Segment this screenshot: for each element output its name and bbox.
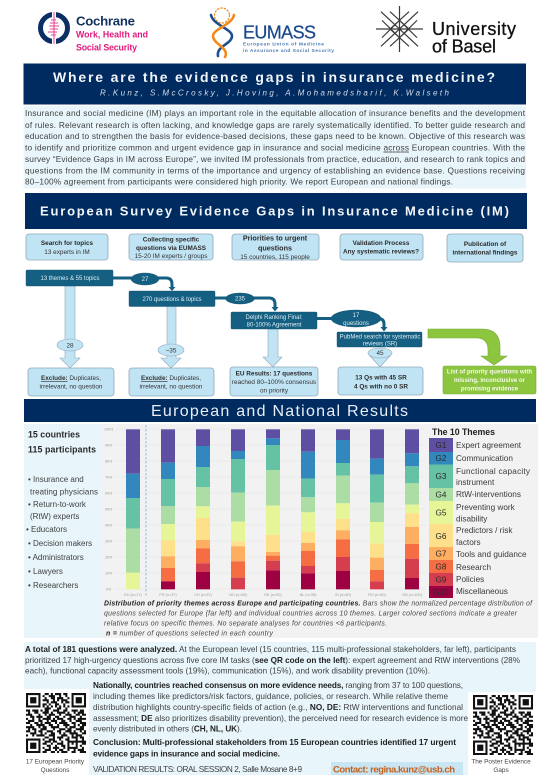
results banner	[24, 399, 536, 422]
authors: R.Kunz, S.McCrosky, J.Hoving, A.Mohamedsharif, K.Walseth	[100, 88, 450, 98]
caption: left QR: 17 European Priority	[26, 758, 85, 766]
caption	[104, 600, 533, 638]
result box: priority list: List of priority questions with	[447, 368, 532, 376]
arrow: 28 excluded	[57, 286, 83, 368]
legend: the 10 themes: G1	[436, 441, 447, 450]
text: national findings: evenly distributed in others (CH, NL, UK).	[93, 724, 242, 734]
flow step: collecting questions: 15-20 IM experts / groups	[135, 253, 207, 260]
legend: the 10 themes: Miscellaneous	[456, 587, 508, 596]
text: conclusion: Conclusion: Multi-professional stakeholders from 15 European countries identified 17 urgent	[93, 737, 456, 747]
legend: the 10 themes: G8	[436, 562, 447, 572]
stacked bar chart: 90%	[105, 444, 113, 448]
arrow: 27 connector	[113, 273, 176, 291]
logo: University of Basel: of Basel	[432, 36, 496, 56]
flow step: validation: Any systematic reviews?	[343, 248, 419, 256]
flow step: publication: international findings	[453, 250, 518, 256]
caption: right QR: The Poster Evidence	[471, 758, 531, 766]
panel: introduction: Insurance and social medicine (IM) plays an important role in the equitable allocation of insurance benefits and the development	[25, 108, 526, 118]
text: summary	[25, 645, 520, 676]
result box: exclude 2	[129, 368, 214, 396]
heading: survey: European Survey Evidence Gaps in Insurance Medicine (IM)	[40, 204, 509, 218]
panel: introduction: survey “Evidence Gaps in IM across Europe”, we invited IM professionals from practice, education, and research to rank topics and	[25, 154, 525, 164]
stacked bar chart: 10%	[105, 572, 113, 576]
legend: the 10 themes: Expert agreement	[456, 441, 522, 450]
text: conclusion: evidence gaps in insurance and social medicine.	[93, 748, 280, 758]
logo: Cochrane Work, Health and Social Security: Cochrane	[76, 14, 135, 28]
text: national findings: assessment; DE also prioritizes disability prevention), the perceived need for research evidence is more	[93, 714, 468, 723]
result box: priority list: missing, inconclusive or	[454, 377, 526, 384]
text: national findings	[93, 681, 468, 734]
caption: relative focus on specific themes. No separate analyses for countries <6 participants.	[104, 620, 387, 628]
legend: the 10 themes: Predictors / risk	[456, 526, 513, 535]
flow: 13 themes box: 13 themes & 55 topics	[40, 276, 100, 282]
stacked bar chart: DE (n=52)	[264, 593, 282, 597]
stacked bar chart: 20%	[105, 556, 113, 560]
legend: the 10 themes: G3	[436, 472, 447, 481]
flow: PubMed box: PubMed search for systematic	[340, 334, 420, 340]
caption: left QR	[26, 758, 85, 774]
panel: results summary	[24, 642, 536, 775]
legend: the 10 themes: G2	[436, 454, 447, 463]
stacked bar chart: RO (n=80)	[368, 593, 387, 597]
legend: the 10 themes: disability	[456, 514, 488, 524]
bar: CH	[196, 429, 210, 589]
bar: EU	[126, 429, 140, 589]
legend: the 10 themes: RtW-interventions	[456, 490, 521, 499]
callout: contact: Contact: regina.kunz@usb.ch	[333, 764, 455, 776]
legend: the 10 themes: G4	[436, 490, 447, 500]
result box: priority list: promising evidence	[461, 386, 519, 392]
caption: right QR	[471, 758, 531, 774]
bar: NL	[301, 429, 315, 589]
stacked bar chart: 70%	[105, 476, 113, 480]
stacked bar chart: 100%	[104, 428, 114, 432]
stacked bar chart	[104, 425, 425, 597]
legend: the 10 themes	[429, 427, 531, 598]
arrow: 35 excluded	[158, 306, 184, 368]
flow step: priorities: Priorities to urgent	[243, 234, 308, 242]
result box: exclude 2: Exclude: Duplicates,	[141, 375, 201, 382]
panel: introduction: 80–100% agreement from participants were considered high priority. We report European and national findings.	[25, 177, 453, 187]
flow: Delphi box: Delphi Ranking Final:	[245, 315, 303, 321]
panel: participants: 15 countries	[28, 430, 80, 440]
stacked bar chart: 50%	[105, 508, 113, 512]
legend: the 10 themes: G6	[436, 532, 447, 541]
flow step: priorities: questions	[258, 244, 292, 252]
legend: the 10 themes: Research	[456, 563, 491, 572]
panel: participants: • Lawyers	[28, 567, 63, 576]
logo: Cochrane Work, Health and Social Security: Work, Health and	[76, 30, 148, 40]
legend: the 10 themes: Tools and guidance	[456, 550, 527, 559]
result box: EU results	[230, 367, 318, 396]
stacked bar chart: 60%	[105, 492, 113, 496]
text: summary: each), functional capacity assessment tools (19%), communication (15%), and work disability prevention (10%).	[25, 666, 430, 676]
flow step: collecting questions: questions via EUMASS	[136, 245, 207, 252]
bar: SI	[336, 429, 350, 589]
stacked bar chart: GB (n=100)	[402, 593, 423, 597]
logo: University of Basel: University	[432, 19, 516, 39]
text: national findings: distribution highlights country-specific fields of action (e.g., NO, DE: RtW interventions and functional	[93, 703, 463, 712]
result box: priority list	[443, 366, 536, 394]
logo: EUMASS: European Union of Medicine	[243, 42, 324, 48]
stacked bar chart: 80%	[105, 460, 113, 464]
caption: Distribution of priority themes across Europe and participating countries. Bars show the normalized percentage distribution of	[104, 600, 533, 608]
arrow: 17 questions connector: questions	[343, 321, 369, 327]
arrow: 235 connector	[215, 293, 278, 312]
legend: the 10 themes: G10	[433, 588, 449, 597]
panel: introduction	[24, 106, 526, 188]
panel: participants: • Educators	[26, 525, 67, 534]
flow step: search for topics: Search for topics	[41, 240, 94, 247]
text: conclusion	[93, 737, 456, 758]
flow step: publication: Publication of	[464, 241, 507, 248]
stacked bar chart: NO (n=68)	[229, 593, 248, 597]
heading: poster title: Where are the evidence gaps in insurance medicine?	[53, 69, 495, 85]
bar: DE	[266, 429, 280, 589]
arrow: 235 connector: 235	[235, 296, 246, 302]
stacked bar chart: FR (n=37)	[159, 593, 177, 597]
text: summary: A total of 181 questions were analyzed. At the European level (15 countries, 115 multi-professional stakeholders, far left), participants	[25, 645, 516, 654]
stacked bar chart: 30%	[105, 540, 113, 544]
result box: EU results: reached 80–100% consensus	[232, 379, 316, 386]
result box: exclude 2: irrelevant, no question	[140, 384, 203, 390]
legend: the 10 themes: G9	[436, 576, 447, 584]
title banner	[24, 64, 526, 104]
stacked bar chart: CH (n=57)	[194, 593, 213, 597]
panel: participants: • Administrators	[28, 553, 84, 562]
result box: EU results: EU Results: 17 questions	[236, 370, 313, 378]
heading: results: European and National Results	[151, 403, 408, 420]
result box: EU results: on priority	[260, 388, 289, 394]
arrow: 45 reviews	[368, 348, 392, 367]
result box: systematic reviews	[338, 367, 423, 395]
arrow: 45 reviews: 45	[376, 350, 384, 357]
flow step: publication	[447, 234, 523, 262]
panel: participants: 115 participants	[28, 444, 96, 454]
result box: exclude 1: Exclude: Duplicates,	[41, 375, 101, 382]
logo: University of Basel	[376, 6, 516, 56]
logo: EUMASS: in Assurance and Social Security	[243, 48, 334, 54]
bar: FR	[161, 429, 175, 589]
flow: 13 themes box	[26, 270, 113, 286]
caption: n = number of questions selected in each country	[106, 630, 274, 638]
text: summary: prioritized 17 high-urgency questions across five core IM tasks (see QR code on the left): expert agreement and RtW interventions (28%	[25, 656, 520, 665]
panel: participants: (RtW) experts	[30, 512, 79, 521]
logo: EUMASS: EUMASS	[243, 22, 316, 42]
legend: the 10 themes: G5	[436, 508, 447, 518]
flow: PubMed box: reviews (SR)	[363, 342, 397, 348]
legend: the 10 themes: The 10 Themes	[432, 427, 495, 437]
panel: participants: • Decision makers	[28, 539, 92, 548]
survey banner	[25, 193, 527, 229]
result box: systematic reviews: 4 Qs with no 0 SR	[354, 384, 408, 390]
arrow: 27 connector: 27	[142, 277, 149, 283]
arrow: Delphi to EU results	[263, 329, 282, 367]
legend: the 10 themes: Functional capacity	[456, 467, 531, 476]
arrow: green curved	[428, 329, 507, 365]
panel: participants	[24, 424, 101, 638]
text: validation results: VALIDATION RESULTS: ORAL SESSION 2, Salle Mosane 8+9	[93, 765, 302, 774]
legend: the 10 themes: G7	[436, 550, 447, 558]
flow step: collecting questions: Collecting specific	[143, 236, 200, 244]
arrow: 35 excluded: ~35	[166, 348, 177, 354]
stacked bar chart: 0%	[106, 588, 112, 592]
legend: the 10 themes: instrument	[456, 478, 495, 487]
flow: Delphi box	[231, 312, 317, 329]
flow: Delphi box: 80-100% Agreement	[247, 322, 302, 328]
panel: introduction: questions from the IM community in terms of the importance and urgency of establishing an evidence base. Questions receiving	[25, 165, 525, 175]
QR code: 17 European priority questions	[23, 690, 89, 775]
icon: Basel star lattice	[376, 6, 423, 52]
flow: 270 questions box	[129, 291, 215, 306]
result box: exclude 1	[28, 368, 114, 396]
flow: PubMed box	[337, 332, 422, 348]
bar: RO	[370, 429, 384, 589]
panel: participants: • Insurance and	[28, 475, 84, 484]
QR code: the poster evidence gaps	[468, 692, 536, 775]
flow: 270 questions box: 270 questions & topics	[142, 297, 202, 303]
arrow: 17 questions connector: 17	[353, 313, 360, 319]
stacked bar chart: NL (n=39)	[300, 593, 317, 597]
legend: the 10 themes: Policies	[456, 575, 484, 584]
panel: introduction: education and to strengthen the basis for evidence-based decisions, these gaps need to be known. Objective of this research was	[25, 131, 525, 141]
panel: participants: • Return-to-work	[28, 500, 87, 509]
legend: the 10 themes: Communication	[456, 454, 513, 463]
flow step: validation	[340, 234, 423, 260]
arrow: 28 excluded: 28	[66, 342, 74, 350]
icon: Cochrane ring	[40, 11, 68, 45]
caption: questions selected for Europe (far left) and individual countries across 10 themes. Larger colored sections indicate a greater	[104, 610, 518, 618]
logo: Cochrane Work, Health and Social Security	[40, 11, 148, 52]
panel: introduction: of rules. Relevant research is often lacking, and knowledge gaps are rarely systematically identified. To better guide research and	[25, 120, 525, 130]
legend: the 10 themes: Preventing work	[456, 503, 516, 512]
flow step: priorities	[232, 234, 319, 261]
panel: participants: treating physicians	[30, 488, 98, 496]
flow step: validation: Validation Process	[353, 240, 410, 247]
result box: exclude 1: irrelevant, no question	[40, 384, 103, 390]
flow step: search for topics	[26, 234, 108, 260]
flow step: priorities: 15 countries, 115 people	[240, 254, 310, 261]
logo: EUMASS	[211, 8, 334, 57]
stacked bar chart: EU (n=17)	[124, 593, 142, 597]
caption: left QR: Questions	[41, 767, 69, 774]
text: national findings: including themes like predictors/risk factors, guidance, policies, or research. While relative theme	[93, 692, 448, 701]
stacked bar chart: SI (n=60)	[335, 593, 352, 597]
logo: Cochrane Work, Health and Social Security: Social Security	[76, 42, 137, 52]
bar: GB	[405, 429, 419, 589]
stacked bar chart: 40%	[105, 524, 113, 528]
caption: right QR: Gaps	[493, 767, 509, 774]
icon: EUMASS double helix	[211, 8, 234, 57]
panel: chart background and caption	[101, 424, 538, 638]
panel: introduction: to identify and prioritize common and urgent evidence gap in insurance and social medicine across European countries. With the	[25, 143, 525, 153]
result box: systematic reviews: 13 Qs with 45 SR	[355, 374, 407, 382]
text: national findings: Nationally, countries reached consensus on more evidence needs, ranging from 37 to 100 questions,	[93, 681, 463, 690]
flow step: search for topics: 13 experts in IM	[44, 249, 90, 256]
bar: NO	[231, 429, 245, 589]
panel: participants: • Researchers	[28, 581, 78, 590]
arrow: 17 questions connector	[317, 310, 388, 332]
legend: the 10 themes: factors	[456, 538, 481, 547]
flow step: collecting questions	[129, 234, 213, 260]
